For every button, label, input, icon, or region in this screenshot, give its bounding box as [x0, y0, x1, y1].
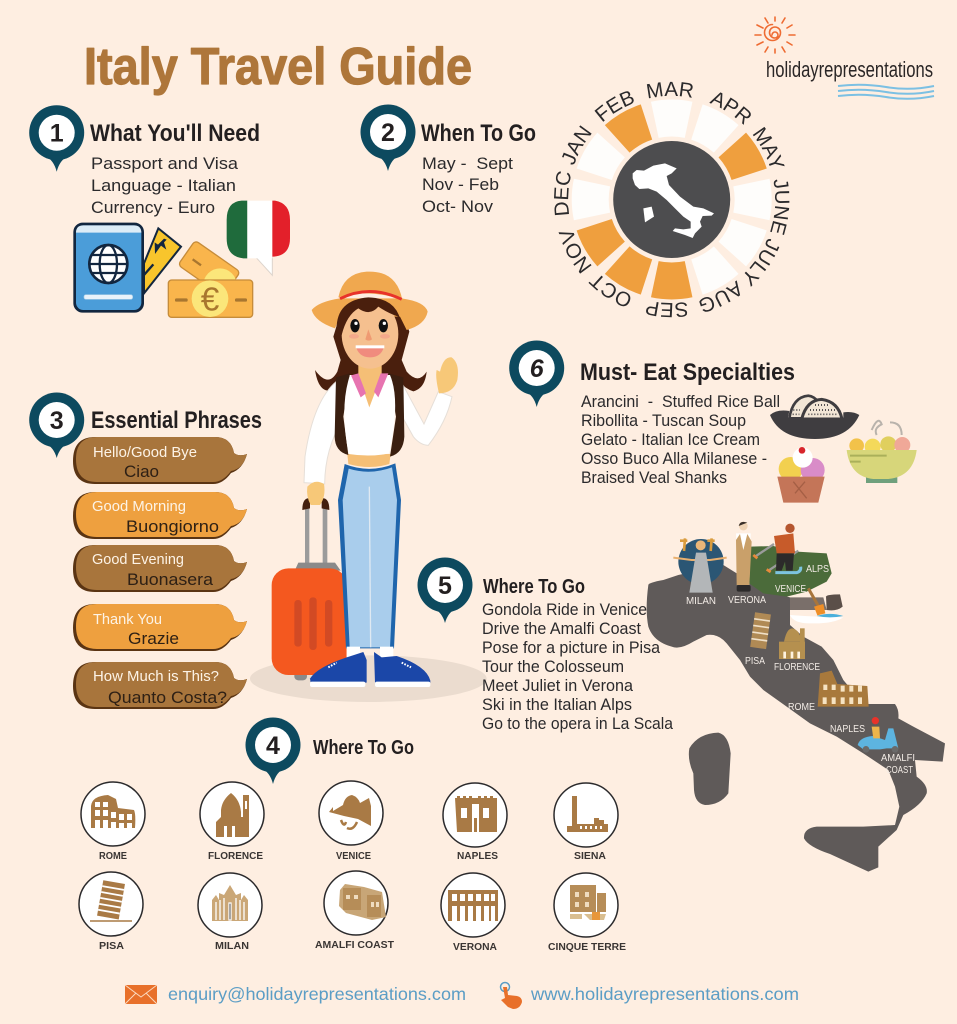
list 5: Drive the Amalfi Coast	[482, 619, 641, 638]
pin 1	[29, 105, 84, 172]
list 5: Pose for a picture in Pisa	[482, 638, 661, 657]
city: verona	[441, 873, 505, 953]
city: venice: VENICE	[336, 850, 371, 862]
list 2	[422, 154, 513, 216]
city: milan	[198, 873, 262, 952]
list 6: Ribollita - Tuscan Soup	[581, 411, 746, 430]
section 5: where to go list	[418, 558, 673, 733]
list 5: Go to the opera in La Scala	[482, 714, 673, 733]
icons: travel documents	[73, 201, 290, 319]
pin 3: 3	[50, 407, 64, 435]
footer contact	[125, 982, 799, 1009]
map labels: ALPS	[806, 564, 829, 575]
section 6: must-eat specialties	[509, 340, 917, 503]
phrase: ciao: Ciao	[124, 462, 159, 481]
icon: soup bowl	[847, 421, 917, 483]
month labels: JAN	[562, 125, 592, 164]
city: rome	[81, 782, 145, 862]
phrase: quanto costa: How Much is This?	[93, 669, 219, 685]
pants	[338, 463, 401, 648]
map labels: FLORENCE	[774, 662, 820, 673]
socks and shoes	[310, 647, 430, 687]
month labels: FEB	[594, 91, 634, 122]
month wheel	[554, 82, 790, 318]
icon: passport	[73, 223, 144, 313]
map labels: PISA	[745, 656, 765, 667]
pin 2: 2	[381, 119, 395, 147]
map labels: COAST	[886, 765, 913, 776]
icon: money	[168, 240, 253, 319]
section 3: essential phrases	[29, 392, 262, 651]
map: alps region	[740, 546, 832, 597]
icon: arancini bowl	[770, 396, 859, 439]
figure: milan opera singer	[673, 538, 727, 593]
month labels: APR	[709, 92, 751, 125]
list 1: Currency - Euro	[91, 198, 215, 217]
city: amalfi coast: AMALFI COAST	[315, 939, 395, 951]
icon: mail	[125, 985, 157, 1004]
phrase: buongiorno: Good Morning	[92, 499, 186, 515]
phrase: grazie	[73, 604, 247, 651]
month labels: MAR	[646, 82, 693, 98]
traveller illustration	[250, 272, 487, 702]
city: cinque terre	[548, 873, 626, 953]
figure: venice gondola	[790, 588, 843, 623]
phrase: buongiorno	[73, 492, 247, 539]
icon: ticket	[144, 228, 181, 293]
list 5: Gondola Ride in Venice	[482, 600, 647, 619]
month labels: OCT	[588, 276, 630, 306]
logo: holiday representations	[755, 17, 934, 99]
month labels: DEC	[554, 171, 570, 216]
month labels	[554, 82, 790, 318]
wheel centre with italy silhouette	[613, 141, 730, 258]
pin 3	[29, 392, 84, 458]
list 2: May - Sept	[422, 154, 513, 173]
phrase: buonasera: Buonasera	[127, 570, 214, 589]
map labels: VENICE	[775, 584, 806, 595]
list 5: Ski in the Italian Alps	[482, 695, 632, 714]
landmark: pisa tower	[750, 612, 771, 649]
pin 5	[418, 558, 472, 623]
list 1: Language - Italian	[91, 176, 236, 195]
list 6: Gelato - Italian Ice Cream	[581, 430, 760, 449]
list 6: Osso Buco Alla Milanese -	[581, 449, 767, 468]
pin 5: 5	[438, 572, 452, 600]
section 4: where to go cities	[79, 718, 626, 953]
city: rome: ROME	[99, 850, 127, 862]
map labels: ROME	[788, 702, 815, 713]
shirt	[344, 375, 395, 456]
list 2: Oct- Nov	[422, 197, 494, 216]
list 1: Passport and Visa	[91, 154, 239, 173]
pin 4	[246, 718, 300, 784]
month labels: AUG	[699, 280, 740, 312]
website: www.holidayrepresentations.com	[530, 984, 799, 1004]
list 5	[482, 600, 673, 733]
city: milan: MILAN	[215, 940, 249, 952]
figure: alps skier	[753, 524, 801, 573]
map labels: NAPLES	[830, 724, 865, 735]
phrase: ciao: Hello/Good Bye	[93, 445, 197, 461]
phrase: grazie: Grazie	[128, 629, 179, 648]
pin 1: 1	[50, 120, 64, 148]
city: verona: VERONA	[453, 941, 497, 953]
city: florence: FLORENCE	[208, 850, 263, 862]
map: mainland	[647, 565, 945, 872]
icon: sun	[755, 17, 795, 53]
map labels: VERONA	[728, 595, 766, 606]
map: sardinia	[689, 733, 731, 805]
hands	[307, 357, 458, 505]
icon: pointer hand	[500, 982, 522, 1009]
list 1	[91, 154, 239, 217]
midriff	[347, 454, 391, 467]
phrase: grazie: Thank You	[93, 612, 162, 628]
heading 3: Essential Phrases	[91, 407, 262, 434]
pin 6	[509, 340, 564, 407]
arms	[304, 381, 452, 484]
city: naples: NAPLES	[457, 850, 498, 862]
list 5: Tour the Colosseum	[482, 657, 624, 676]
city: siena: SIENA	[574, 850, 606, 862]
figure: scooter rider	[858, 717, 898, 753]
month labels: JUNE	[770, 180, 790, 235]
month labels: SEP	[646, 302, 688, 318]
icon: gelato cup	[777, 447, 825, 503]
phrase: quanto costa	[73, 662, 247, 709]
landmark: florence duomo	[779, 628, 805, 659]
heading 1: What You'll Need	[90, 120, 260, 147]
hat crown	[338, 272, 402, 300]
phrase: buonasera	[73, 545, 247, 592]
figure: verona man	[736, 522, 752, 592]
list 2: Nov - Feb	[422, 175, 499, 194]
city: cinque terre: CINQUE TERRE	[548, 941, 626, 953]
city: florence	[200, 782, 264, 862]
list 6	[581, 392, 780, 487]
icon: money: €	[201, 282, 220, 319]
wheel segments	[590, 118, 753, 281]
month labels: NOV	[558, 232, 592, 274]
section 1: what you'll need	[29, 105, 290, 319]
pin 2	[360, 104, 416, 171]
heading 2: When To Go	[421, 120, 536, 147]
pin 6: 6	[530, 355, 545, 383]
section 2: when to go	[360, 104, 536, 216]
icons: food	[770, 396, 917, 503]
icon: suitcase	[272, 498, 347, 680]
list 6: Braised Veal Shanks	[581, 468, 727, 487]
neck and collar	[351, 365, 388, 407]
city: pisa: PISA	[99, 940, 124, 952]
city: venice	[319, 781, 383, 862]
map labels	[686, 564, 915, 776]
italy map	[647, 522, 945, 872]
map labels: MILAN	[686, 596, 716, 607]
heading 4: Where To Go	[313, 737, 414, 759]
phrase: quanto costa: Quanto Costa?	[108, 688, 227, 707]
ground shadow	[250, 655, 487, 702]
month labels: MAY	[752, 126, 785, 166]
title: Italy Travel Guide	[84, 38, 472, 96]
month labels: JULY	[744, 239, 780, 287]
heading 6: Must- Eat Specialties	[580, 359, 795, 386]
city: pisa	[79, 872, 143, 952]
city: amalfi coast	[315, 871, 395, 951]
logo waves	[838, 85, 934, 99]
city: siena	[554, 783, 618, 862]
backpack straps	[335, 373, 404, 457]
phrase: ciao	[73, 437, 247, 484]
icon: italian flag speech bubble	[227, 201, 290, 275]
map labels: AMALFI	[881, 753, 915, 764]
list 5: Meet Juliet in Verona	[482, 676, 634, 695]
city: naples	[443, 783, 507, 862]
phrase: buongiorno: Buongiorno	[126, 517, 219, 536]
pin 4: 4	[266, 732, 280, 760]
landmark: colosseum	[818, 671, 869, 707]
email: enquiry@holidayrepresentations.com	[168, 984, 466, 1004]
heading 5: Where To Go	[483, 576, 585, 598]
list 6: Arancini - Stuffed Rice Ball	[581, 392, 780, 411]
phrase: buonasera: Good Evening	[92, 552, 184, 568]
face	[337, 297, 402, 369]
hair back	[315, 310, 427, 391]
hat brim	[312, 298, 428, 330]
